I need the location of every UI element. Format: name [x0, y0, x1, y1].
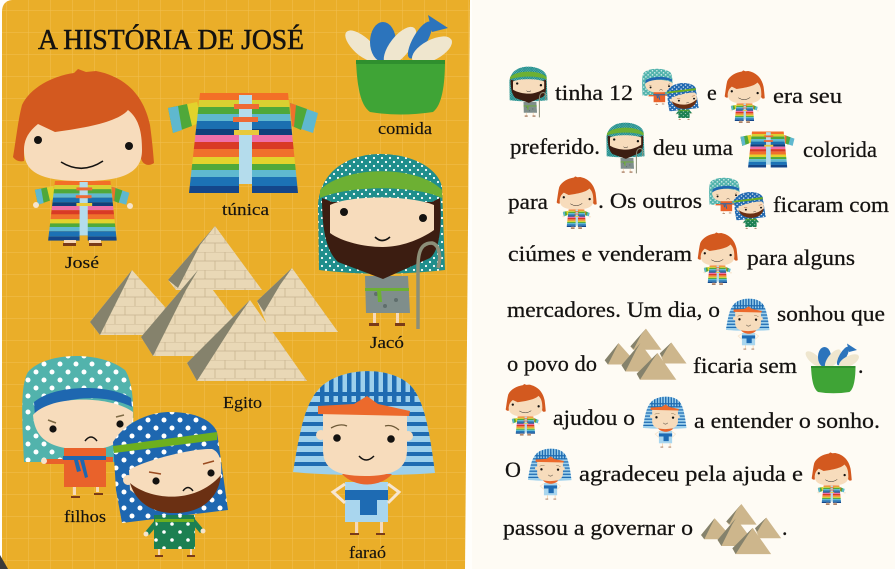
icon: tunic — [740, 131, 794, 167]
character: sons — [22, 356, 228, 557]
story line 1 — [509, 67, 842, 123]
story line 3 — [508, 176, 889, 229]
story line 2 — [510, 123, 877, 173]
icon: food basket — [803, 344, 861, 393]
label: Jacó: Jacó — [370, 333, 404, 352]
story line 7 — [506, 384, 880, 447]
text: sonhou que: sonhou que — [777, 301, 885, 326]
icon: Jacó — [509, 67, 548, 117]
icon: José — [725, 70, 765, 123]
text: era seu: era seu — [773, 83, 842, 108]
text: Os outros: . Os outros — [598, 188, 702, 213]
text: o povo do: o povo do — [507, 351, 597, 376]
character: Jacó — [318, 154, 445, 329]
left page panel — [0, 0, 470, 569]
text: tinha 12: tinha 12 — [555, 80, 633, 105]
story line 8 — [505, 447, 852, 505]
text: passou a governar o: passou a governar o — [503, 515, 693, 540]
text: ficaram com: ficaram com — [773, 192, 889, 217]
label: Egito: Egito — [223, 393, 262, 412]
label: comida: comida — [378, 119, 432, 138]
story line 6 — [507, 329, 864, 393]
icon: pyramids — [701, 504, 781, 554]
icon: pharaoh — [527, 447, 573, 499]
text: preferido.: preferido. — [510, 134, 600, 159]
icon: pharaoh — [725, 297, 771, 349]
label: faraó: faraó — [349, 543, 386, 562]
story line 9 — [503, 504, 788, 554]
text: a entender o sonho.: a entender o sonho. — [694, 408, 880, 433]
text: ajudou o: ajudou o — [553, 405, 635, 430]
icon: Jacó — [606, 123, 644, 173]
icon: José — [698, 232, 738, 285]
label: José: José — [65, 253, 99, 272]
character: pharaoh — [290, 366, 440, 535]
text: ficaria sem: ficaria sem — [693, 353, 797, 378]
icon: sons — [709, 178, 766, 229]
icon: José — [812, 452, 852, 505]
text: O: O — [505, 457, 521, 482]
character: José — [13, 69, 154, 246]
text: ciúmes e venderam: ciúmes e venderam — [508, 241, 692, 266]
text: period: . — [858, 353, 864, 378]
icon: José — [506, 384, 546, 435]
label: túnica: túnica — [222, 200, 270, 219]
label: filhos: filhos — [64, 507, 106, 526]
story line 4 — [508, 232, 855, 285]
text: e: e — [707, 80, 717, 105]
text: deu uma: deu uma — [653, 135, 733, 160]
icon: José — [557, 176, 597, 229]
text: para: para — [508, 189, 548, 214]
icon: pharaoh — [642, 395, 688, 447]
text: mercadores. Um dia, o: mercadores. Um dia, o — [507, 297, 720, 322]
icon: sons — [642, 69, 699, 120]
text: period: . — [782, 515, 788, 540]
story line 5 — [507, 297, 885, 349]
text: colorida: colorida — [803, 137, 877, 162]
illustration: tunic — [168, 93, 318, 193]
illustration: food basket — [340, 15, 456, 114]
title: A HISTÓRIA DE JOSÉ — [38, 25, 304, 56]
icon: pyramids — [605, 329, 687, 380]
right page — [472, 0, 895, 569]
illustration: pyramids of Egypt — [90, 226, 338, 381]
text: agradeceu pela ajuda e: agradeceu pela ajuda e — [579, 461, 803, 486]
text: para alguns: para alguns — [747, 245, 855, 270]
